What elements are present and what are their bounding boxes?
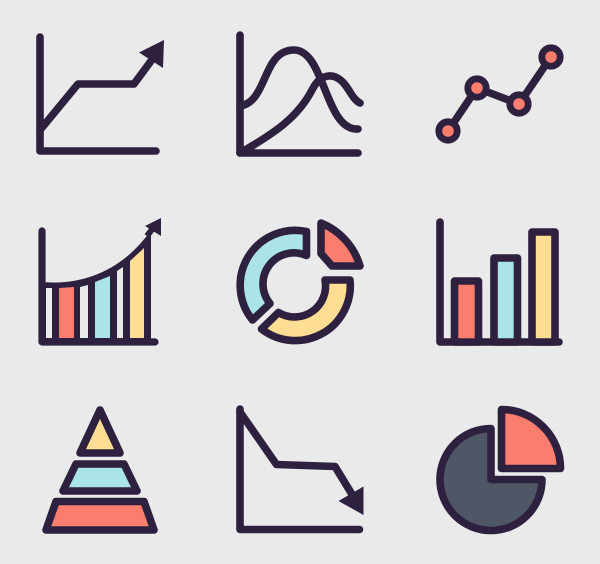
icon: layered pyramid chart	[46, 410, 154, 530]
icon: falling line chart with arrow	[240, 409, 364, 530]
icon: two bell curves chart	[240, 35, 360, 153]
icon: pie chart with detached slice	[440, 410, 560, 530]
icon: bar chart with growth curve arrow	[42, 218, 161, 342]
icon: rising line chart with arrow	[40, 37, 164, 151]
icon: three bar chart	[440, 222, 559, 342]
icon: connected dots line graph	[439, 48, 560, 140]
icon: segmented donut chart	[240, 223, 360, 341]
